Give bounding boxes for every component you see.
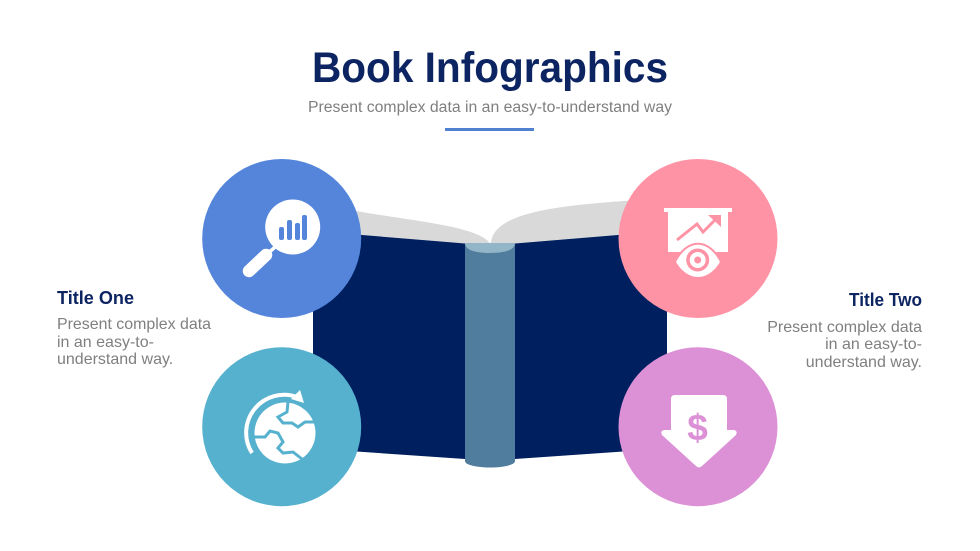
body: Present complex data — [57, 316, 211, 333]
text block: title one — [57, 288, 211, 368]
body: Present complex data — [767, 319, 922, 336]
body: understand way. — [806, 354, 922, 371]
subtitle: Present complex data in an easy-to-understand way — [308, 99, 672, 116]
heading: Title One — [57, 288, 134, 308]
body: understand way. — [57, 351, 173, 368]
body: in an easy-to- — [825, 336, 922, 353]
heading: Title Two — [849, 290, 922, 310]
title underline — [445, 128, 534, 131]
circle: chart and eye — [618, 159, 778, 318]
icon: presentation board with eye — [664, 208, 732, 277]
left cover — [313, 231, 465, 459]
spine top highlight — [465, 243, 515, 253]
left pages — [340, 208, 490, 244]
dollar sign: $ — [687, 407, 708, 448]
right cover — [515, 231, 667, 459]
icon: magnifying glass with bars — [249, 200, 320, 271]
text block: title two — [767, 290, 922, 371]
title: Book Infographics — [312, 44, 668, 92]
spine — [465, 243, 515, 468]
book illustration — [313, 200, 667, 468]
circle: analytics — [202, 159, 361, 318]
body — [767, 319, 922, 371]
body — [57, 316, 211, 368]
right pages — [490, 200, 640, 244]
circle: globe — [202, 347, 361, 506]
icon: down arrow with dollar — [661, 395, 737, 468]
circle: dollar down — [618, 347, 778, 506]
icon: globe with arrow — [246, 390, 316, 464]
body: in an easy-to- — [57, 334, 154, 351]
